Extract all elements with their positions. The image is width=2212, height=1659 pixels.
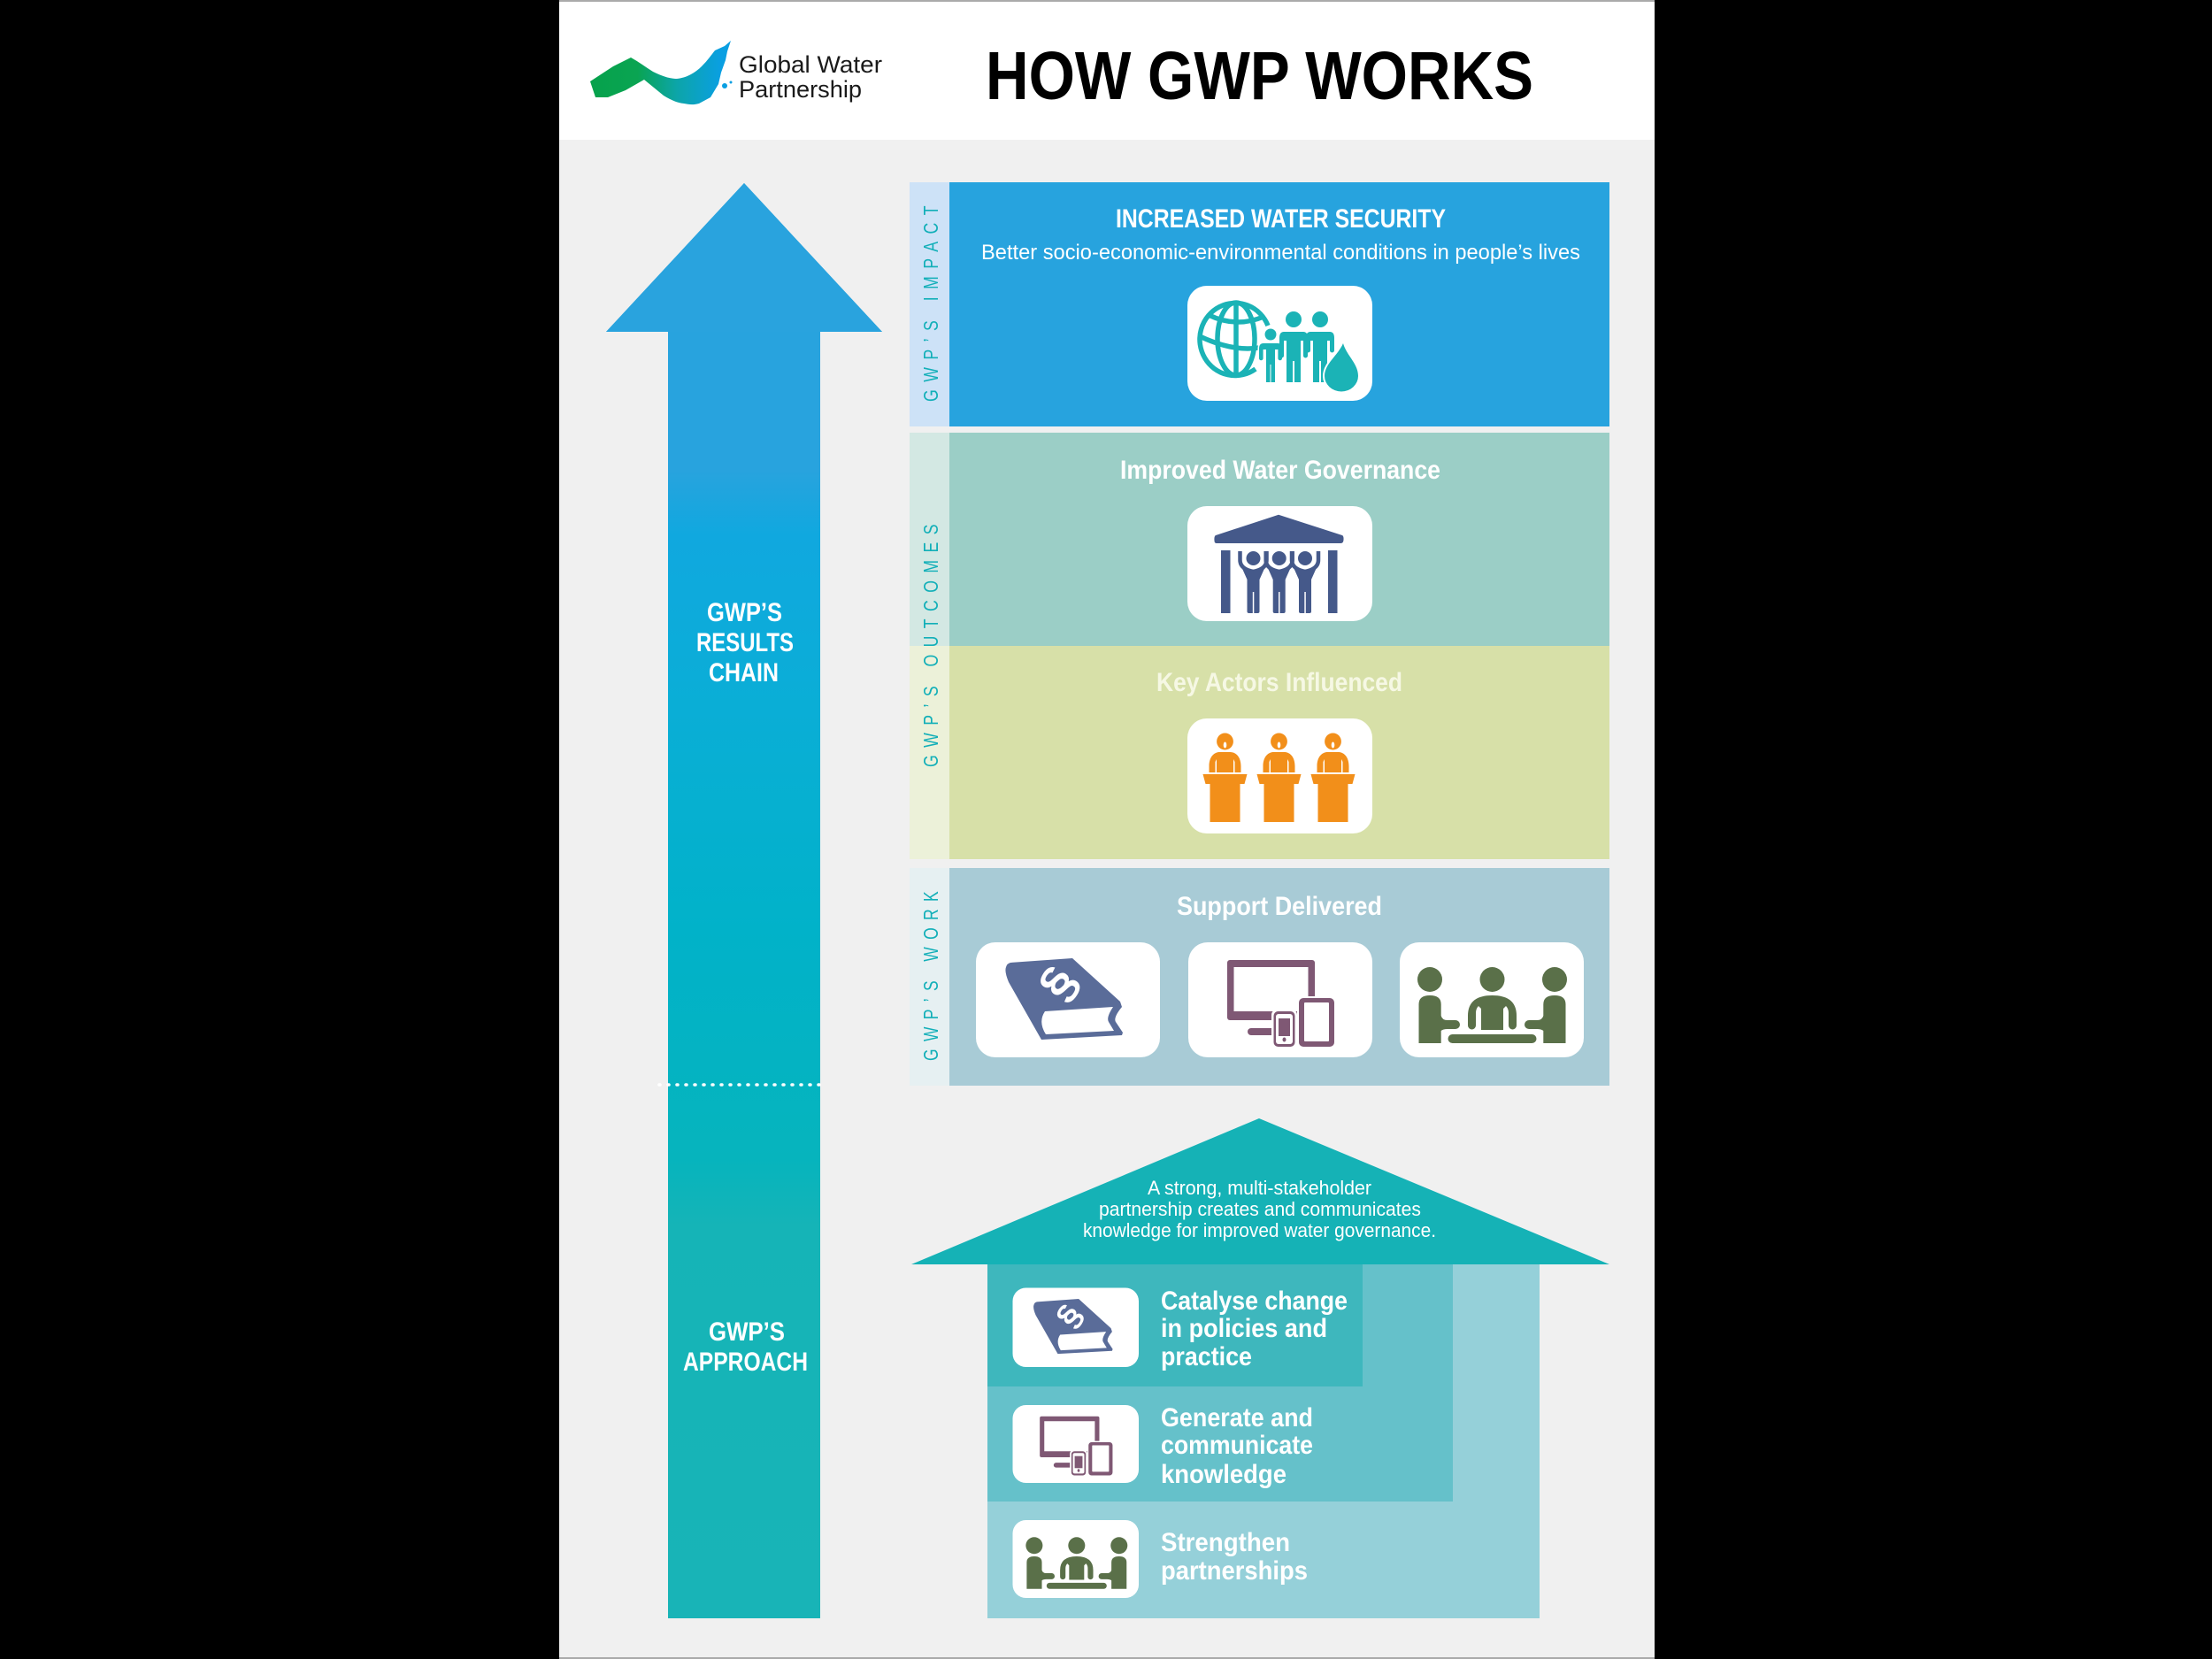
label: generate and communicate knowledge: knowledge — [1161, 1460, 1286, 1489]
logo: Global Water Partnership: Partnership — [739, 76, 862, 103]
side label: work: GWP’S WORK — [919, 884, 942, 1061]
label: catalyse change in policies and practice: Catalyse change — [1161, 1286, 1348, 1316]
side label: outcomes: GWP’S OUTCOMES — [919, 517, 942, 767]
label: catalyse change in policies and practice — [1161, 1286, 1348, 1371]
arrow label: results chain: CHAIN — [709, 658, 779, 687]
heading: improved water governance: Improved Water Governance — [1120, 456, 1440, 485]
panel: GWP's outcomes — [910, 433, 1609, 859]
label: generate and communicate knowledge: Generate and — [1161, 1403, 1313, 1432]
heading: increased water security: INCREASED WATER SECURITY — [1116, 204, 1446, 234]
icon: people holding up a building — [1187, 506, 1372, 621]
label: strengthen partnerships: Strengthen — [1161, 1528, 1290, 1557]
arrow label: approach — [683, 1317, 808, 1377]
arrow label: results chain — [696, 598, 794, 687]
logo: Global Water Partnership: Global Water — [739, 51, 882, 78]
sub-panel: improved water governance — [949, 433, 1609, 646]
icon: law book — [976, 942, 1160, 1057]
label: strengthen partnerships — [1161, 1528, 1308, 1586]
label: catalyse change in policies and practice: practice — [1161, 1342, 1252, 1371]
house roof with statement: knowledge for improved water governance. — [1083, 1219, 1436, 1241]
house roof with statement: partnership creates and communicates — [1099, 1198, 1421, 1220]
arrow label: approach: GWP’S — [709, 1317, 785, 1347]
heading: support delivered: Support Delivered — [1177, 892, 1382, 921]
panel: GWP's work — [910, 868, 1609, 1086]
icon: globe, family and water drop — [1187, 286, 1372, 401]
icon: law book: § — [1027, 956, 1088, 1010]
panel: GWP's impact — [910, 182, 1609, 426]
label: generate and communicate knowledge — [1161, 1403, 1313, 1489]
heading: key actors influenced: Key Actors Influenced — [1156, 668, 1402, 697]
house roof with statement: A strong, multi-stakeholder — [1148, 1177, 1371, 1199]
subheading: Better socio-economic-environmental conditions in people’s lives — [981, 241, 1580, 265]
label: catalyse change in policies and practice: in policies and — [1161, 1314, 1327, 1343]
sub-panel: key actors influenced — [949, 646, 1609, 859]
house roof with statement — [911, 1118, 1609, 1264]
icon: law book small — [1012, 1288, 1139, 1367]
house level: catalyse change — [987, 1264, 1363, 1386]
label: generate and communicate knowledge: communicate — [1161, 1431, 1313, 1460]
icon: law book small: § — [1049, 1298, 1090, 1334]
icon: three speakers at lecterns — [1187, 718, 1372, 833]
arrow label: results chain: GWP’S — [707, 598, 782, 627]
arrow label: approach: APPROACH — [683, 1348, 808, 1377]
icon: computer, phone and tablet — [1188, 942, 1372, 1057]
label: strengthen partnerships: partnerships — [1161, 1556, 1308, 1586]
house level: generate and communicate knowledge — [987, 1264, 1453, 1502]
icon: people meeting small — [1012, 1520, 1139, 1598]
logo: Global Water Partnership — [590, 41, 882, 104]
arrow label: results chain: RESULTS — [696, 628, 794, 657]
house level: strengthen partnerships — [987, 1264, 1540, 1618]
title: HOW GWP WORKS — [986, 38, 1533, 114]
house: GWP's approach — [911, 1118, 1609, 1618]
icon: computer, phone and tablet small — [1012, 1405, 1139, 1483]
side label: impact: GWP’S IMPACT — [919, 198, 942, 402]
icon: people meeting at a table — [1400, 942, 1584, 1057]
arrow: GWP's results chain — [606, 183, 882, 1618]
